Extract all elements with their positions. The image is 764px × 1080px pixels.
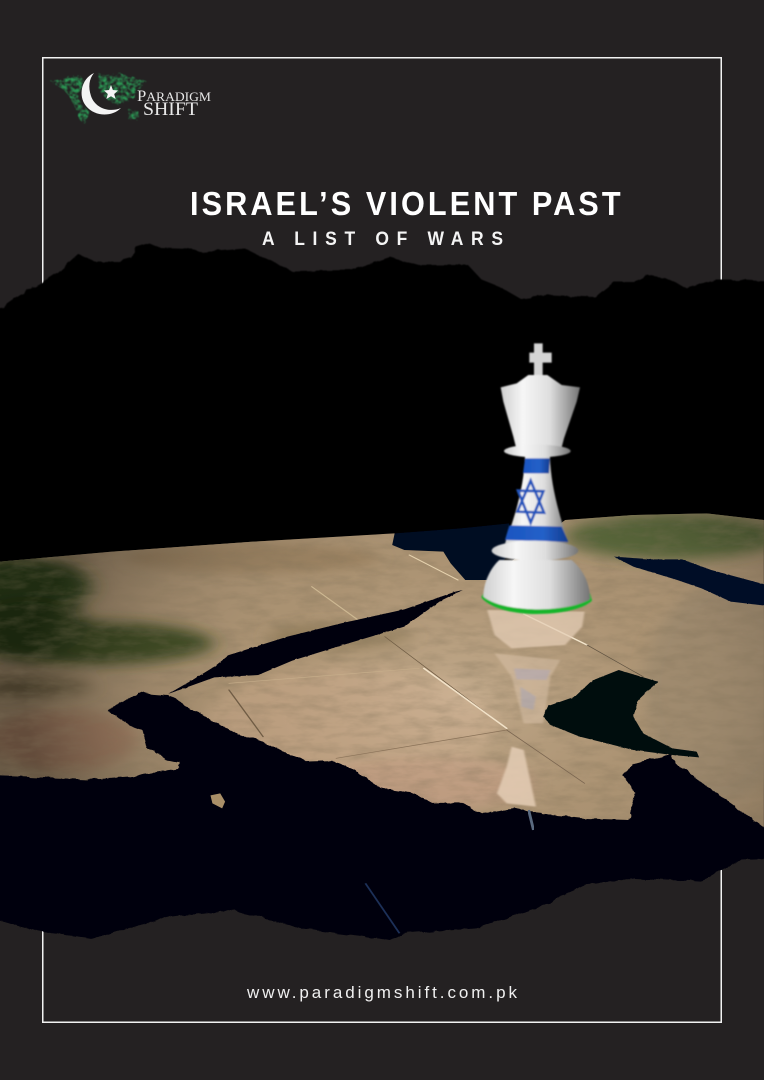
- subtitle: A LIST OF WARS: [262, 227, 503, 249]
- title: ISRAEL’S VIOLENT PAST: [190, 185, 621, 222]
- white frame: [43, 58, 721, 1022]
- terrain colour patches: [0, 543, 764, 810]
- logo second line: SHIFT: [143, 99, 198, 120]
- torn black image area: [0, 243, 764, 600]
- star: [104, 85, 118, 99]
- chess king with the Israeli flag: [481, 343, 592, 614]
- lower collar: [492, 541, 578, 561]
- green base ring: [481, 593, 592, 614]
- faint streak at the coast: [529, 810, 533, 830]
- red sea gulf: [168, 590, 463, 694]
- land surface: [0, 510, 764, 857]
- crown: [501, 375, 580, 447]
- upper sea: [392, 523, 509, 583]
- website url: www.paradigmshift.com.pk: [246, 983, 518, 1002]
- top blue band: [523, 458, 550, 473]
- base dome: [483, 560, 590, 609]
- central light glow: [0, 510, 764, 857]
- green world map: [51, 74, 147, 124]
- star of David: [517, 481, 544, 523]
- map of the Middle East: [0, 510, 764, 940]
- southern sea: [0, 693, 764, 940]
- cross: [529, 343, 552, 375]
- logo: [51, 73, 211, 124]
- bottom blue band: [505, 525, 568, 542]
- caspian style inland sea: [614, 557, 764, 607]
- crescent: [82, 73, 121, 115]
- small island: [210, 793, 225, 808]
- border lines on the map: [229, 555, 643, 783]
- upper collar: [504, 445, 571, 457]
- stem: [505, 457, 568, 543]
- faint blue streak: [365, 883, 400, 933]
- logo wordmark: PARADIGM: [137, 88, 211, 105]
- terrain texture: [0, 519, 764, 819]
- chess piece reflection on the map: [487, 610, 585, 807]
- persian gulf: [543, 670, 699, 757]
